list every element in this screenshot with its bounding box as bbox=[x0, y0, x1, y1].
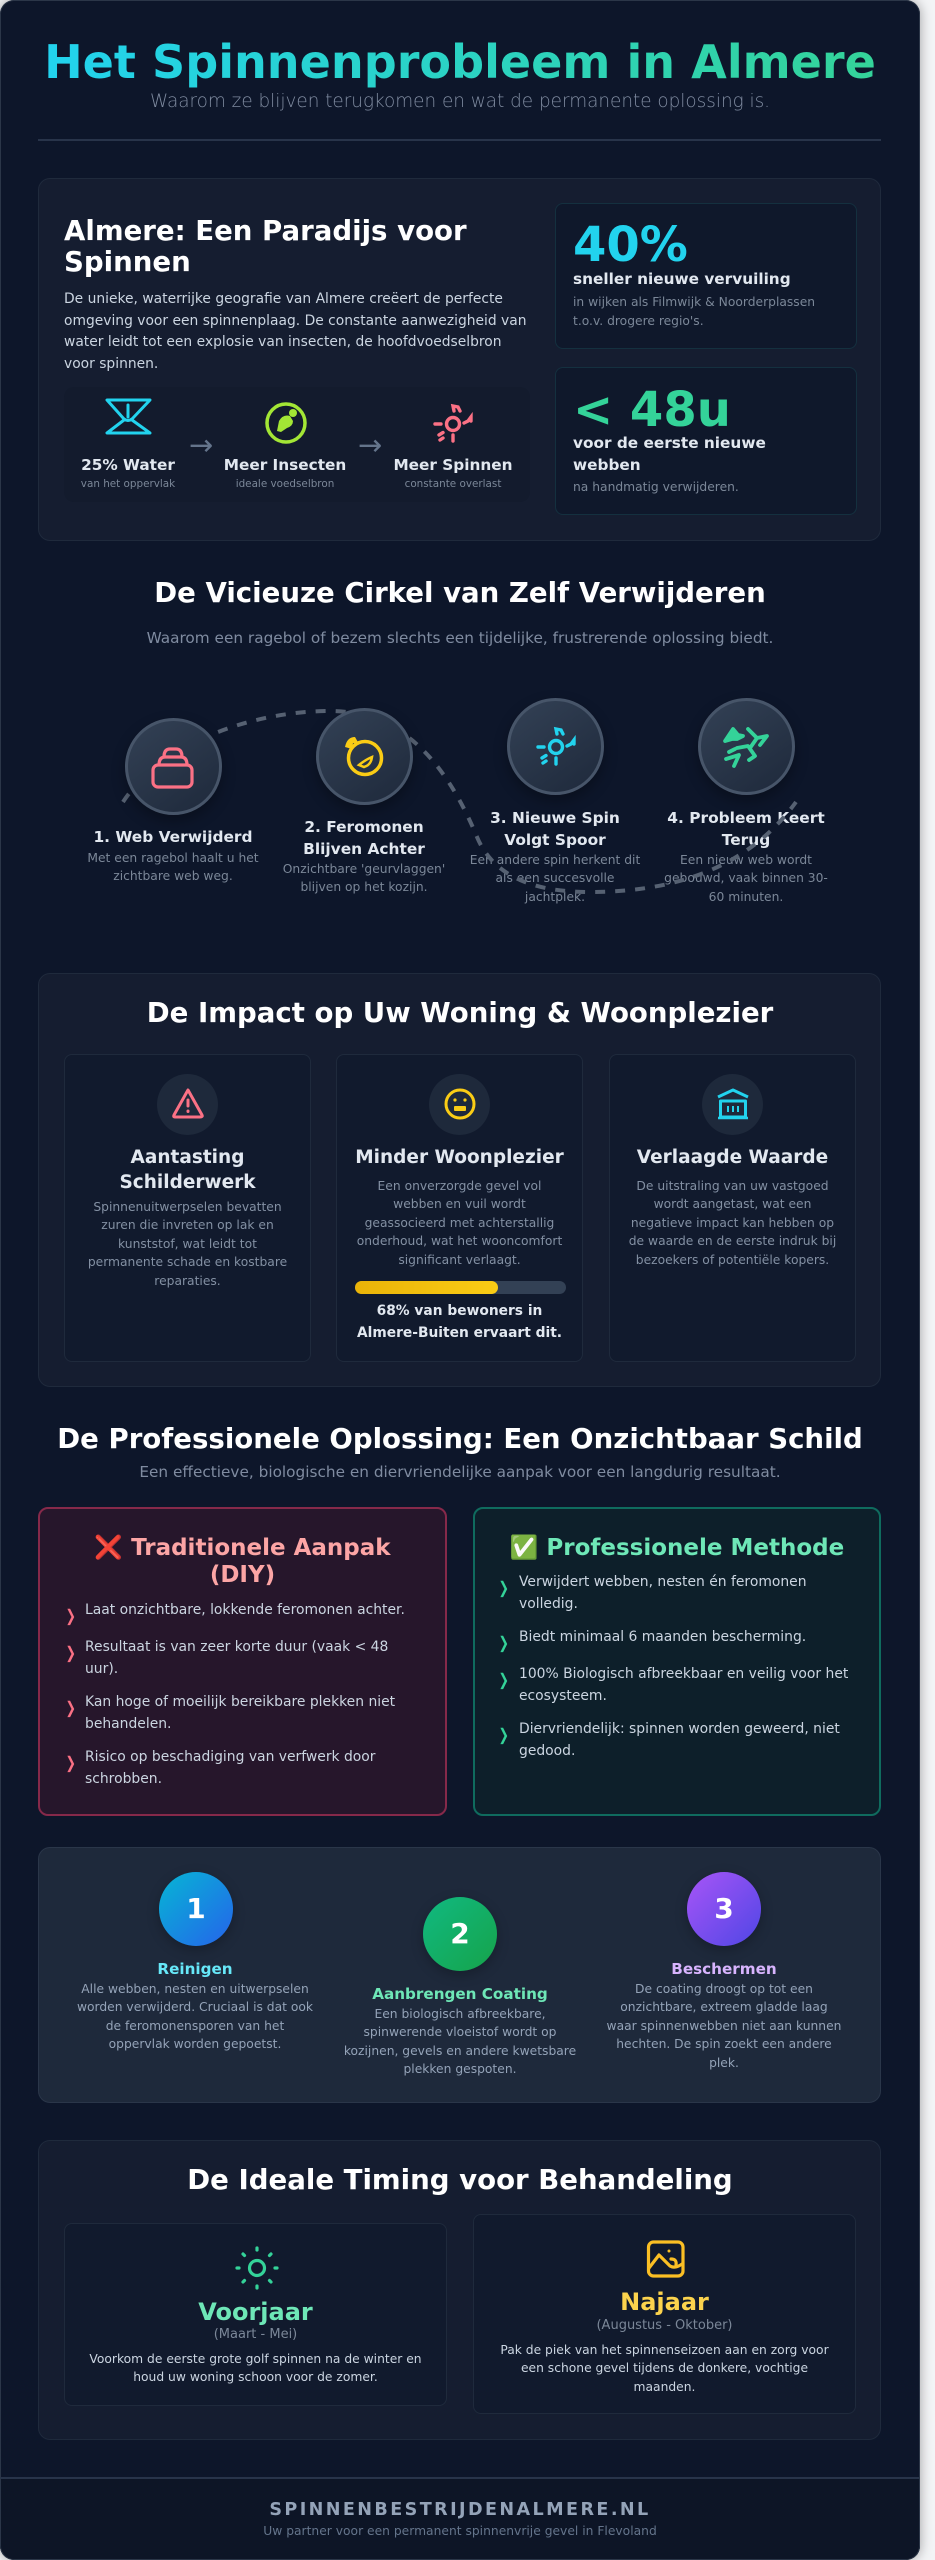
card text: De uitstraling van uw vastgoed bbox=[636, 1179, 829, 1193]
label: more insects: Meer Insecten bbox=[224, 456, 346, 474]
card text bbox=[88, 1200, 287, 1288]
stat card: 40% bbox=[555, 203, 857, 349]
list: professional pros: Verwijdert webben, nesten én feromonen bbox=[519, 1574, 807, 1590]
list: traditional cons: schrobben. bbox=[85, 1770, 162, 1786]
icon circle: bank bbox=[702, 1074, 763, 1135]
list: traditional cons: ❭ bbox=[64, 1753, 77, 1772]
list: professional pros: volledig. bbox=[519, 1596, 578, 1612]
step 2 title: Blijven Achter bbox=[303, 840, 425, 858]
footer tagline: Uw partner voor een permanent spinnenvrije gevel in Flevoland bbox=[263, 2524, 657, 2538]
heading: traditional: (DIY) bbox=[210, 1562, 275, 1588]
step 3 description bbox=[470, 853, 640, 904]
step 4 title: 4. Probleem Keert bbox=[667, 809, 825, 827]
step title: Beschermen bbox=[671, 1960, 777, 1978]
list: professional pros: Diervriendelijk: spinnen worden geweerd, niet bbox=[519, 1721, 840, 1737]
step 3 description: als een succesvolle bbox=[496, 871, 614, 885]
dashed cycle path bbox=[121, 709, 798, 894]
step number 1 bbox=[159, 1872, 233, 1946]
subheading: vicious circle: Waarom een ragebol of bezem slechts een tijdelijke, frustrerende oplossing biedt. bbox=[147, 629, 773, 647]
card text: zuren die invreten op lak en bbox=[101, 1218, 274, 1232]
step text: waar spinnenwebben niet aan kunnen bbox=[607, 2019, 841, 2033]
list: traditional cons: Resultaat is van zeer korte duur (vaak < 48 bbox=[85, 1639, 388, 1655]
icon: unhappy face bbox=[444, 1088, 476, 1120]
icon: warning triangle bbox=[172, 1088, 204, 1118]
icon: web brush bbox=[151, 747, 194, 789]
sublabel: water: van het oppervlak bbox=[81, 478, 175, 490]
step text: kozijnen, gevels en andere kwetsbare bbox=[344, 2044, 576, 2058]
card text: de waarde en de eerste indruk bij bbox=[629, 1234, 836, 1248]
panel: professional method bbox=[473, 1507, 881, 1816]
season name: Voorjaar bbox=[198, 2298, 313, 2326]
card text: permanente schade en kostbare bbox=[88, 1255, 287, 1269]
list: professional pros: ❭ bbox=[497, 1633, 510, 1652]
card title: Minder Woonplezier bbox=[355, 1147, 564, 1168]
stat number: 40%: 40% bbox=[573, 217, 688, 273]
list: professional pros: ❭ bbox=[497, 1670, 510, 1689]
bullet 2 bbox=[64, 1639, 388, 1676]
step number 2: 2 bbox=[450, 1917, 470, 1950]
step 2 description bbox=[283, 862, 445, 894]
step 4 description: gebouwd, vaak binnen 30- bbox=[664, 871, 828, 885]
step 3 title: Volgt Spoor bbox=[504, 830, 606, 848]
card: living pleasure bbox=[336, 1054, 583, 1362]
step 2 description: blijven op het kozijn. bbox=[300, 880, 428, 894]
panel: impact bbox=[38, 973, 881, 1387]
list: professional pros: ❭ bbox=[497, 1578, 510, 1597]
bullet 3 bbox=[501, 1663, 871, 1665]
heading: vicious circle: De Vicieuze Cirkel van Zelf Verwijderen bbox=[154, 576, 766, 609]
panel: Almere paradise bbox=[38, 178, 881, 541]
step 1 circle bbox=[125, 718, 222, 815]
card text: reparaties. bbox=[154, 1274, 221, 1288]
step text: plekken gespoten. bbox=[403, 2062, 517, 2076]
card text: Spinnenuitwerpselen bevatten bbox=[93, 1200, 282, 1214]
list: traditional cons: ❭ bbox=[64, 1698, 77, 1717]
step 4 description: Een nieuw web wordt bbox=[680, 853, 812, 867]
heading: traditional: ❌ Traditionele Aanpak bbox=[94, 1535, 391, 1561]
list: traditional cons: Kan hoge of moeilijk bereikbare plekken niet bbox=[85, 1694, 395, 1710]
heading: professional: ✅ Professionele Methode bbox=[510, 1535, 844, 1561]
season text: Pak de piek van het spinnenseizoen aan en zorg voor bbox=[500, 2343, 829, 2357]
card text: wordt aangetast, wat een bbox=[654, 1197, 811, 1211]
icon: pheromone drop bbox=[345, 737, 384, 776]
card text bbox=[357, 1179, 562, 1267]
stat label: voor de eerste nieuwe bbox=[573, 434, 766, 452]
step 3 title bbox=[490, 809, 620, 848]
card: autumn bbox=[473, 2214, 856, 2414]
stat label bbox=[573, 434, 766, 474]
bullet 3 bbox=[64, 1694, 395, 1732]
step number 1: 1 bbox=[186, 1892, 206, 1925]
season text: houd uw woning schoon voor de zomer. bbox=[133, 2370, 378, 2384]
progress caption bbox=[357, 1303, 562, 1340]
step number 2 bbox=[423, 1897, 497, 1971]
card text: geassocieerd met achterstallig bbox=[365, 1216, 554, 1230]
card text: onderhoud, wat het wooncomfort bbox=[357, 1234, 562, 1248]
season name: Najaar bbox=[620, 2288, 709, 2316]
card: spring bbox=[64, 2223, 447, 2406]
season text bbox=[474, 2341, 855, 2396]
step title: Aanbrengen Coating bbox=[372, 1985, 548, 2003]
step text: de feromonensporen van het bbox=[106, 2019, 284, 2033]
bullet 4 bbox=[501, 1718, 871, 1720]
stat card: 48 hours bbox=[555, 367, 857, 515]
step 3 description: jachtplek. bbox=[525, 890, 585, 904]
stat note: na handmatig verwijderen. bbox=[573, 480, 739, 494]
card text: bezoekers of potentiële kopers. bbox=[636, 1253, 829, 1267]
icon: new spider bbox=[536, 726, 576, 766]
subheading: solution: Een effectieve, biologische en diervriendelijke aanpak voor een langdurig resultaat. bbox=[139, 1463, 781, 1481]
progress bar: 68% bbox=[355, 1281, 566, 1294]
step 2 description: Onzichtbare 'geurvlaggen' bbox=[283, 862, 445, 876]
heading: traditional bbox=[94, 1534, 391, 1588]
bullet 4 bbox=[64, 1749, 376, 1786]
step title: Reinigen bbox=[157, 1960, 233, 1978]
step number 3: 3 bbox=[714, 1892, 734, 1925]
step text: Alle webben, nesten en uitwerpselen bbox=[81, 1982, 309, 1996]
card text: significant verlaagt. bbox=[398, 1253, 521, 1267]
step 4 description bbox=[664, 853, 828, 904]
list: professional pros: Biedt minimaal 6 maanden bescherming. bbox=[519, 1629, 806, 1645]
stat number: 48u: < 48u bbox=[573, 382, 731, 438]
card text: webben en vuil wordt bbox=[393, 1197, 526, 1211]
card title bbox=[119, 1147, 256, 1192]
icon circle: warning bbox=[157, 1074, 218, 1135]
progress caption: 68% van bewoners in bbox=[377, 1303, 542, 1319]
label: more spiders: Meer Spinnen bbox=[393, 456, 513, 474]
card text: Een onverzorgde gevel vol bbox=[378, 1179, 541, 1193]
step text: De coating droogt op tot een bbox=[635, 1982, 813, 1996]
step 2 circle bbox=[316, 708, 413, 805]
panel: process steps bbox=[38, 1847, 881, 2103]
stat note: in wijken als Filmwijk & Noorderplassen bbox=[573, 295, 815, 309]
stat note: t.o.v. drogere regio's. bbox=[573, 314, 704, 328]
icon: spider bbox=[433, 404, 473, 443]
step 2 title: 2. Feromonen bbox=[304, 818, 424, 836]
heading: timing: De Ideale Timing voor Behandeling bbox=[187, 2163, 733, 2196]
step 2 title bbox=[303, 818, 425, 858]
heading: Almere: Almere: Een Paradijs voor bbox=[64, 214, 467, 247]
list: professional pros bbox=[497, 1574, 848, 1758]
step 1 description: zichtbare web weg. bbox=[113, 869, 233, 883]
step text: plek. bbox=[709, 2056, 739, 2070]
stat note bbox=[573, 295, 815, 328]
step text bbox=[65, 1980, 325, 2054]
step 3: protect bbox=[594, 1958, 854, 2072]
season months: (Augustus - Oktober) bbox=[596, 2318, 732, 2333]
bullet 1 bbox=[501, 1571, 871, 1573]
bullet 2 bbox=[501, 1626, 871, 1628]
text: Almere intro bbox=[64, 291, 527, 372]
icon: sun bbox=[235, 2246, 279, 2290]
step 3 description: Een andere spin herkent dit bbox=[470, 853, 640, 867]
flow diagram: water to spiders bbox=[64, 387, 530, 502]
stat label: sneller nieuwe vervuiling bbox=[573, 270, 791, 288]
season text bbox=[65, 2350, 446, 2387]
arrow: water to insects: → bbox=[189, 428, 213, 462]
heading: impact: De Impact op Uw Woning & Woonplezier bbox=[147, 996, 773, 1029]
icon: insect bbox=[265, 402, 307, 444]
list: traditional cons: Laat onzichtbare, lokkende feromonen achter. bbox=[85, 1602, 405, 1618]
icon: water hourglass bbox=[105, 398, 152, 434]
stat label: webben bbox=[573, 456, 641, 474]
icon: bank building bbox=[717, 1088, 749, 1120]
card: reduced value bbox=[609, 1054, 856, 1362]
season text: een schone gevel tijdens de donkere, vochtige bbox=[521, 2361, 808, 2375]
list: professional pros: ecosysteem. bbox=[519, 1688, 607, 1704]
icon circle: face bbox=[429, 1074, 490, 1135]
list: traditional cons: uur). bbox=[85, 1660, 118, 1676]
step text bbox=[594, 1980, 854, 2072]
season text: Voorkom de eerste grote golf spinnen na de winter en bbox=[89, 2352, 422, 2366]
heading: Almere: Spinnen bbox=[64, 244, 191, 278]
list: traditional cons bbox=[64, 1602, 405, 1786]
icon: returning web bbox=[723, 727, 769, 768]
step 4 title bbox=[667, 809, 825, 848]
card text: negatieve impact kan hebben op bbox=[631, 1216, 834, 1230]
step 4 circle bbox=[698, 698, 795, 795]
progress caption: Almere-Buiten ervaart dit. bbox=[357, 1324, 562, 1340]
text: Almere intro: De unieke, waterrijke geografie van Almere creëert de perfecte bbox=[64, 291, 503, 307]
step 2 text bbox=[283, 818, 445, 894]
step text: oppervlak worden gepoetst. bbox=[109, 2037, 281, 2051]
list: traditional cons: behandelen. bbox=[85, 1716, 171, 1732]
list: professional pros: ❭ bbox=[497, 1725, 510, 1744]
step 3 title: 3. Nieuwe Spin bbox=[490, 809, 620, 827]
title: Het Spinnenprobleem in Almere bbox=[44, 35, 876, 89]
sublabel: spiders: constante overlast bbox=[405, 478, 501, 490]
list: traditional cons: Risico op beschadiging van verfwerk door bbox=[85, 1749, 376, 1765]
card title: Schilderwerk bbox=[119, 1172, 256, 1192]
subtitle: Waarom ze blijven terugkomen en wat de permanente oplossing is. bbox=[150, 91, 770, 112]
step text: hechten. De spin zoekt een andere bbox=[616, 2037, 832, 2051]
step text: Een biologisch afbreekbare, bbox=[374, 2007, 546, 2021]
label: 25% water: 25% Water bbox=[81, 456, 175, 474]
step 4 description: 60 minuten. bbox=[709, 890, 783, 904]
list: traditional cons: ❭ bbox=[64, 1643, 77, 1662]
sublabel: insects: ideale voedselbron bbox=[236, 478, 334, 490]
text: Almere intro: voor spinnen. bbox=[64, 356, 158, 372]
step number 3 bbox=[687, 1872, 761, 1946]
season text: maanden. bbox=[634, 2380, 695, 2394]
step text: worden verwijderd. Cruciaal is dat ook bbox=[77, 2000, 313, 2014]
card text: kunststof, wat leidt tot bbox=[118, 1237, 257, 1251]
card title: Aantasting bbox=[131, 1147, 244, 1168]
step 1 description bbox=[87, 850, 259, 883]
list: traditional cons: ❭ bbox=[64, 1606, 77, 1625]
card text bbox=[629, 1179, 836, 1267]
card: paintwork bbox=[64, 1054, 311, 1362]
step 3 circle bbox=[507, 698, 604, 795]
step 1 text bbox=[87, 828, 259, 883]
bullet 1 bbox=[64, 1602, 405, 1626]
step 3 text bbox=[470, 809, 640, 904]
step 2: coating bbox=[329, 1983, 591, 2079]
heading: Almere bbox=[64, 214, 467, 278]
step text: onzichtbare, extreem gladde laag bbox=[620, 2000, 828, 2014]
icon: landscape picture bbox=[647, 2240, 685, 2278]
step 1 title: 1. Web Verwijderd bbox=[93, 828, 253, 846]
text: Almere intro: water leidt tot een explosie van insecten, de hoofdvoedselbron bbox=[64, 334, 502, 350]
list: professional pros: 100% Biologisch afbreekbaar en veilig voor het bbox=[519, 1666, 848, 1682]
step 4 text bbox=[664, 809, 828, 904]
text: Almere intro: omgeving voor een spinnenplaag. De constante aanwezigheid van bbox=[64, 312, 527, 328]
step 1 description: Met een ragebol haalt u het bbox=[87, 850, 259, 864]
step 4 title: Terug bbox=[722, 830, 770, 848]
list: professional pros: gedood. bbox=[519, 1742, 575, 1758]
footer bbox=[0, 2477, 920, 2560]
season months: (Maart - Mei) bbox=[214, 2327, 297, 2342]
card title: Verlaagde Waarde bbox=[637, 1147, 828, 1168]
arrow: insects to spiders: → bbox=[358, 428, 382, 462]
panel: traditional approach bbox=[38, 1507, 447, 1816]
footer site name: SPINNENBESTRIJDENALMERE.NL bbox=[269, 2500, 651, 2520]
step text bbox=[329, 2005, 591, 2079]
panel: timing bbox=[38, 2140, 881, 2440]
heading: professional solution: De Professionele Oplossing: Een Onzichtbaar Schild bbox=[57, 1422, 863, 1455]
step 1: cleaning bbox=[65, 1958, 325, 2054]
step text: spinwerende vloeistof wordt op bbox=[364, 2025, 556, 2039]
